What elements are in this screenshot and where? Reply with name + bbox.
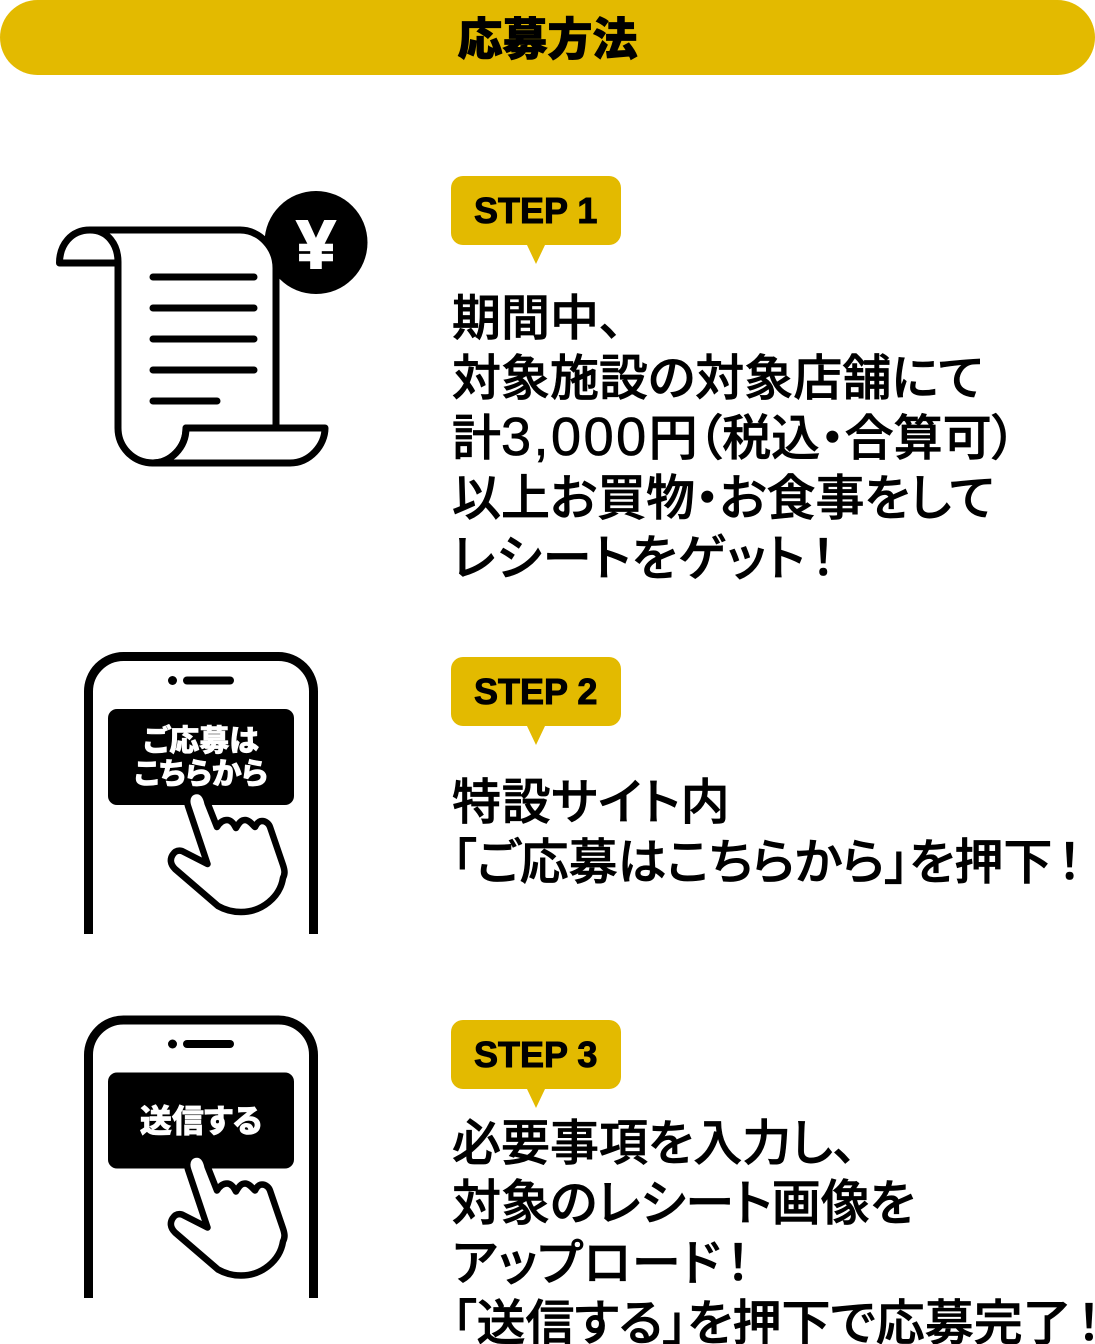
badge: step 3: STEP 3 <box>474 1034 597 1075</box>
badge: step 1 <box>451 176 621 264</box>
step 1 text: 以上お買物・お食事をして <box>452 459 995 530</box>
badge: step 3 <box>451 1020 621 1108</box>
title banner <box>0 0 1095 75</box>
step 3 text: アップロード！ <box>452 1224 750 1295</box>
step 3 text: 対象のレシート画像を <box>452 1164 915 1235</box>
badge: step 2: STEP 2 <box>474 670 597 712</box>
step 2 text: 特設サイト内 <box>452 763 730 834</box>
icon: phone with apply button: ご応募は <box>143 716 259 760</box>
badge: step 1: STEP 1 <box>474 190 597 231</box>
step 3 text <box>452 1104 1095 1344</box>
step 1 text: 対象施設の対象店舗にて <box>452 339 984 410</box>
icon: phone with apply button: こちらから <box>134 749 268 793</box>
badge: step 2 <box>451 657 621 745</box>
icon: phone with send button: 送信する <box>140 1096 262 1142</box>
step 1 text <box>452 279 1016 590</box>
step 1 text: 計3,000円（税込・合算可） <box>452 399 1016 470</box>
icon: phone with apply button <box>84 652 318 934</box>
step 1 text: レシートをゲット！ <box>452 519 835 590</box>
title banner: 応募方法 <box>457 3 638 68</box>
step 2 text: 「ご応募はこちらから」を押下！ <box>452 823 1082 894</box>
step 3 text: 必要事項を入力し、 <box>452 1104 857 1175</box>
icon: receipt with yen coin <box>56 191 368 466</box>
step 2 text <box>452 763 1082 894</box>
step 1 text: 期間中、 <box>452 279 624 350</box>
icon: receipt with yen coin: ¥ <box>297 207 335 283</box>
icon: phone with send button <box>84 1016 318 1298</box>
